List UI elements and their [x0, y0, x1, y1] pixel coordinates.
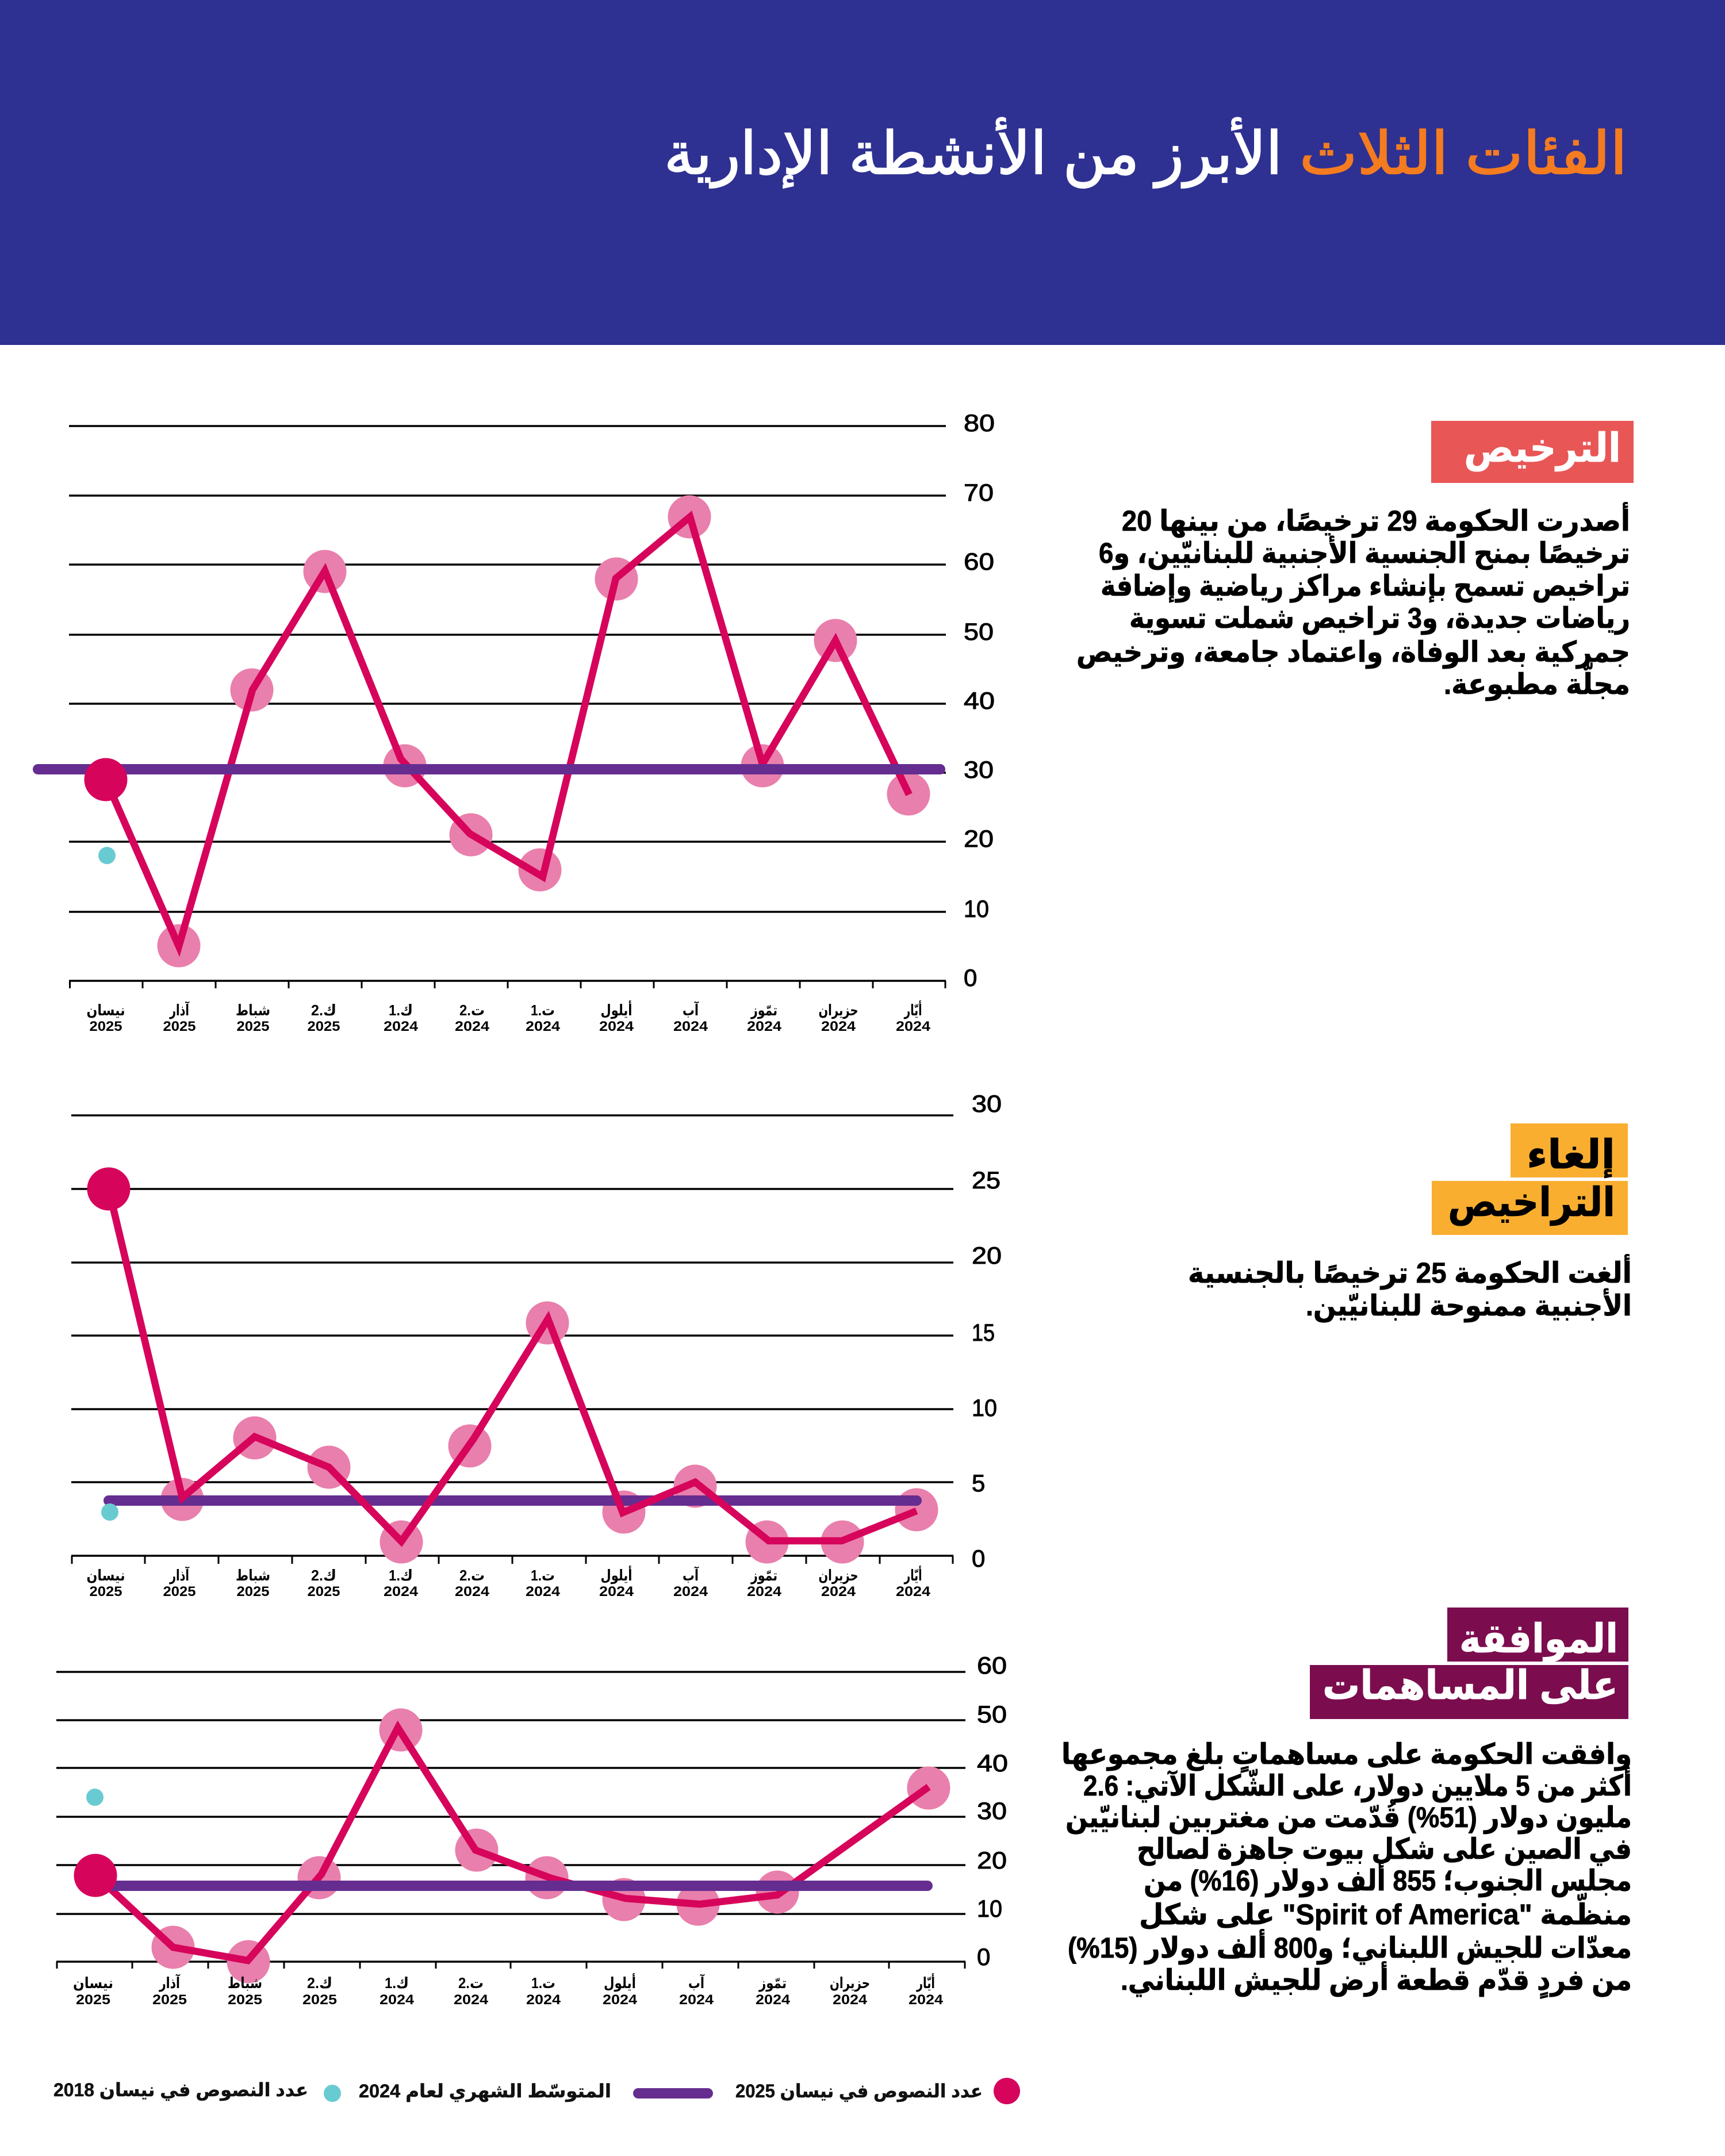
x axis labels: شباط	[228, 1974, 262, 1992]
x axis labels: ت.2	[459, 1002, 485, 1019]
heading: licences	[1431, 421, 1634, 483]
header band	[0, 0, 1725, 345]
y axis labels	[964, 409, 995, 991]
body text: وافقت الحكومة على مساهماتٍ بلغ مجموعها	[1061, 1738, 1632, 1773]
y axis labels: 0	[964, 964, 977, 991]
x axis labels: 2024	[379, 1992, 415, 2008]
x axis labels: شباط	[236, 1567, 270, 1584]
body text: رياضات جديدة، و3 تراخيص شملت تسوية	[1129, 602, 1630, 635]
April 2018 point	[98, 847, 116, 864]
x axis labels	[86, 1566, 931, 1599]
title: الفئات الثلاث	[1300, 121, 1627, 186]
x axis labels: ك.2	[307, 1974, 332, 1992]
body text: منظّمة "Spirit of America" على شكل	[1139, 1893, 1632, 1931]
x axis labels: 2024	[599, 1584, 634, 1599]
x axis labels: 2024	[526, 1019, 561, 1034]
y axis labels: 50	[977, 1701, 1007, 1728]
body text: أكثر من 5 ملايين دولار، على الشّكل الآتي: 2.6	[1083, 1767, 1632, 1803]
x axis labels: أيّار	[916, 1973, 935, 1992]
legend item: April 2018: عدد النصوص في نيسان 2018	[53, 2080, 308, 2101]
x axis labels: أيلول	[600, 1000, 632, 1019]
x axis labels: 2025	[307, 1019, 340, 1034]
heading: contributions	[1310, 1608, 1628, 1719]
x axis labels: ت.2	[458, 1974, 484, 1992]
average line	[95, 1881, 927, 1891]
x axis labels: 2025	[307, 1584, 340, 1599]
chart: licence cancellations	[71, 1090, 1002, 1599]
April 2025 point	[87, 1167, 130, 1211]
y axis labels: 10	[977, 1895, 1002, 1922]
x axis labels: آب	[683, 1566, 699, 1584]
y axis labels	[977, 1652, 1008, 1970]
x axis labels: ت.2	[459, 1567, 485, 1584]
title: الأبرز من الأنشطة الإدارية	[664, 117, 1282, 188]
x axis labels: 2025	[90, 1019, 122, 1034]
x axis labels: 2024	[455, 1584, 490, 1599]
x axis labels	[86, 1000, 931, 1034]
y axis labels: 30	[964, 756, 994, 783]
y axis labels: 20	[977, 1847, 1007, 1874]
body text: في الصين على شكل بيوت جاهزة لصالح	[1137, 1833, 1632, 1866]
x axis labels: تمّوز	[750, 1002, 777, 1019]
x axis labels: 2025	[163, 1019, 195, 1034]
y axis labels: 20	[972, 1242, 1002, 1269]
x axis labels: ت.1	[531, 1002, 555, 1019]
body text: ترخيصًا بمنح الجنسية الأجنبية للبنانيّين، و6	[1099, 535, 1630, 570]
y axis labels: 15	[972, 1319, 995, 1346]
heading: contributions: الموافقة	[1459, 1616, 1618, 1662]
y axis labels: 0	[977, 1943, 990, 1970]
x axis labels: 2024	[673, 1019, 708, 1034]
x axis labels: ك.2	[311, 1567, 336, 1584]
x axis labels: ت.1	[531, 1974, 555, 1992]
data line	[109, 1189, 917, 1541]
x axis labels: 2025	[302, 1992, 337, 2008]
x axis labels: 2024	[821, 1019, 856, 1034]
panel: cancellations text	[1188, 1123, 1632, 1323]
y axis labels: 10	[964, 895, 989, 922]
x axis labels: 2024	[603, 1992, 638, 2008]
x axis labels: 2024	[747, 1584, 782, 1599]
x axis labels: 2024	[896, 1584, 931, 1599]
x axis labels: شباط	[236, 1002, 270, 1019]
body text	[1076, 502, 1630, 701]
x axis labels: آذار	[169, 1001, 190, 1019]
x axis labels: 2024	[908, 1992, 944, 2008]
x axis labels: 2024	[599, 1019, 634, 1034]
x axis labels: تمّوز	[758, 1974, 787, 1992]
heading: cancellations: التراخيص	[1448, 1180, 1615, 1226]
body text: من فردٍ قدّم قطعة أرض للجيش اللبناني.	[1121, 1961, 1632, 1999]
y axis labels: 30	[977, 1797, 1007, 1824]
points	[158, 496, 930, 967]
x axis labels: نيسان	[86, 1002, 125, 1019]
x axis labels: 2024	[747, 1019, 782, 1034]
y axis labels: 40	[964, 687, 995, 714]
y axis labels: 40	[977, 1750, 1008, 1777]
x axis labels: أيلول	[600, 1566, 632, 1585]
legend item: 2024 monthly average: المتوسّط الشهري لعام 2024	[359, 2081, 611, 2102]
title	[664, 117, 1627, 188]
x axis labels: 2024	[833, 1992, 868, 2008]
y axis labels: 70	[964, 479, 994, 506]
x axis labels: آب	[688, 1974, 705, 1992]
average line	[109, 1495, 917, 1506]
x axis labels: حزيران	[830, 1974, 870, 1992]
body text: تراخيص تسمح بإنشاء مراكز رياضية وإضافة	[1101, 570, 1630, 603]
y axis labels: 10	[972, 1394, 997, 1421]
x axis labels: ك.2	[311, 1002, 336, 1019]
x axis labels: 2025	[90, 1584, 122, 1599]
panel: contributions text	[1061, 1608, 1632, 1999]
body text: الأجنبية ممنوحة للبنانيّين.	[1306, 1288, 1632, 1323]
body text: مليون دولار (51%) قُدّمت من مغتربين لبنانيّين	[1065, 1799, 1632, 1835]
body text: مجلس الجنوب؛ 855 ألف دولار (16%) من	[1144, 1862, 1632, 1898]
body text: معدّات للجيش اللبناني؛ و800 ألف دولار (15%)	[1068, 1929, 1632, 1965]
x axis labels: 2024	[384, 1019, 419, 1034]
heading: cancellations	[1432, 1123, 1628, 1235]
x axis labels: 2024	[384, 1584, 419, 1599]
April 2025 point	[74, 1854, 117, 1897]
y axis labels: 50	[964, 618, 994, 645]
x axis labels: حزيران	[819, 1567, 858, 1585]
y axis labels: 60	[964, 548, 994, 575]
y axis labels: 25	[972, 1167, 1000, 1194]
x axis labels: أيلول	[604, 1973, 636, 1992]
legend item: April 2025	[735, 2078, 1020, 2104]
x axis labels: 2024	[526, 1992, 561, 2008]
y axis labels: 30	[972, 1090, 1002, 1117]
legend	[53, 2078, 1020, 2104]
data line	[106, 517, 909, 946]
x axis labels: 2024	[821, 1584, 856, 1599]
x axis labels: 2025	[76, 1992, 110, 2008]
points	[152, 1709, 950, 1984]
April 2018 point	[86, 1789, 103, 1806]
x axis labels: ت.1	[531, 1567, 555, 1584]
y axis labels: 80	[964, 409, 995, 436]
x axis labels: ك.1	[385, 1974, 409, 1992]
chart: licences	[38, 409, 995, 1034]
chart: contributions	[56, 1652, 1008, 2008]
x axis labels: أيّار	[903, 1000, 922, 1019]
body text	[1188, 1254, 1632, 1323]
x axis labels: 2025	[237, 1584, 269, 1599]
x axis labels: 2025	[163, 1584, 195, 1599]
body text: مجلّة مطبوعة.	[1444, 662, 1630, 701]
body text: ألغت الحكومة 25 ترخيصًا بالجنسية	[1188, 1254, 1632, 1290]
points	[161, 1302, 938, 1564]
x axis labels: 2025	[237, 1019, 269, 1034]
x axis labels: آذار	[158, 1974, 181, 1992]
x axis labels: آب	[683, 1001, 699, 1019]
y axis labels: 0	[972, 1545, 985, 1572]
x axis labels: 2024	[526, 1584, 561, 1599]
x axis labels: 2024	[679, 1992, 714, 2008]
x axis labels: أيّار	[903, 1566, 922, 1584]
heading: contributions: على المساهمات	[1322, 1663, 1618, 1708]
x axis labels: 2024	[896, 1019, 931, 1034]
data line	[96, 1728, 929, 1961]
April 2018 point	[101, 1503, 118, 1521]
x axis labels: ك.1	[389, 1002, 413, 1019]
x axis labels	[73, 1973, 944, 2008]
x axis labels: آذار	[169, 1566, 190, 1584]
x axis labels: نيسان	[86, 1567, 125, 1584]
x axis labels: 2024	[455, 1019, 490, 1034]
x axis labels: 2025	[152, 1992, 187, 2008]
body text	[1061, 1738, 1632, 1999]
body text: أصدرت الحكومة 29 ترخيصًا، من بينها 20	[1122, 502, 1630, 538]
legend item: April 2025: عدد النصوص في نيسان 2025	[735, 2081, 983, 2102]
body text: جمركية بعد الوفاة، واعتماد جامعة، وترخيص	[1076, 636, 1630, 669]
y axis labels: 5	[972, 1470, 985, 1497]
heading: cancellations: إلغاء	[1527, 1132, 1615, 1179]
x axis labels: حزيران	[819, 1002, 858, 1019]
April 2025 point	[84, 758, 128, 801]
x axis labels: 2024	[454, 1992, 489, 2008]
x axis labels: 2024	[673, 1584, 708, 1599]
y axis labels: 60	[977, 1652, 1007, 1679]
x axis labels: نيسان	[73, 1974, 113, 1992]
x axis labels: 2024	[756, 1992, 791, 2008]
panel: licences text	[1076, 421, 1634, 701]
y axis labels: 20	[964, 825, 994, 852]
y axis labels	[972, 1090, 1002, 1572]
x axis labels: 2025	[228, 1992, 262, 2008]
heading: licences: الترخيص	[1464, 425, 1621, 472]
x axis labels: ك.1	[389, 1567, 413, 1584]
x axis labels: تمّوز	[750, 1567, 777, 1585]
average line	[38, 764, 940, 774]
